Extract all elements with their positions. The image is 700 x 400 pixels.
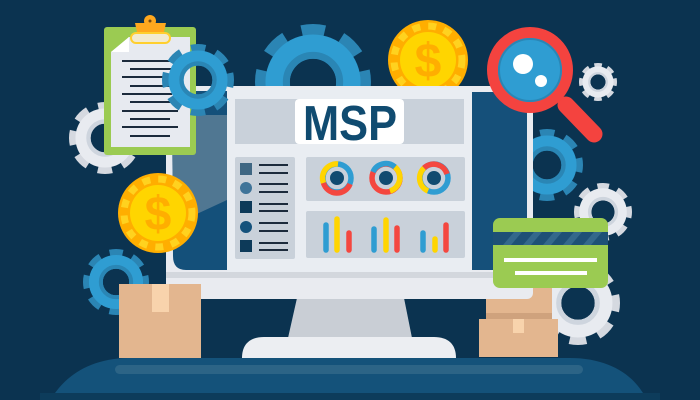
screen left side (172, 91, 227, 270)
gear: bottom left blue (86, 252, 146, 312)
clipboard clip (131, 15, 170, 43)
coin: left: $ (145, 188, 172, 241)
gear: small white (581, 65, 615, 99)
gear: top centre (261, 30, 365, 134)
screen right side (472, 92, 527, 270)
box: lower right (479, 319, 558, 357)
donut 1 (323, 164, 351, 193)
gear: bottom right white (540, 265, 616, 341)
box: left (119, 284, 201, 358)
monitor bezel (166, 86, 533, 299)
gear: right mid white (577, 186, 629, 238)
coin: top: $ (415, 35, 442, 88)
coin: left (118, 173, 198, 253)
coin: top (388, 20, 468, 100)
monitor stand (242, 298, 456, 358)
clipboard (104, 15, 196, 155)
desk (40, 358, 660, 400)
magnifying glass (492, 32, 594, 134)
gear: clipboard blue (166, 48, 230, 112)
list panel (235, 157, 295, 259)
gear: right blue (515, 133, 579, 197)
bar chart panel (306, 211, 465, 258)
donut 2 (372, 164, 400, 192)
box: upper right (486, 288, 552, 320)
monitor (166, 86, 533, 299)
MSP label: MSP (303, 97, 397, 151)
gear: left white (73, 106, 137, 170)
donut 3 (420, 164, 448, 192)
donut chart panel (306, 157, 465, 201)
header bar (235, 99, 464, 144)
clipboard text lines (122, 61, 178, 136)
screen content panel (227, 88, 472, 272)
credit card (493, 218, 608, 288)
